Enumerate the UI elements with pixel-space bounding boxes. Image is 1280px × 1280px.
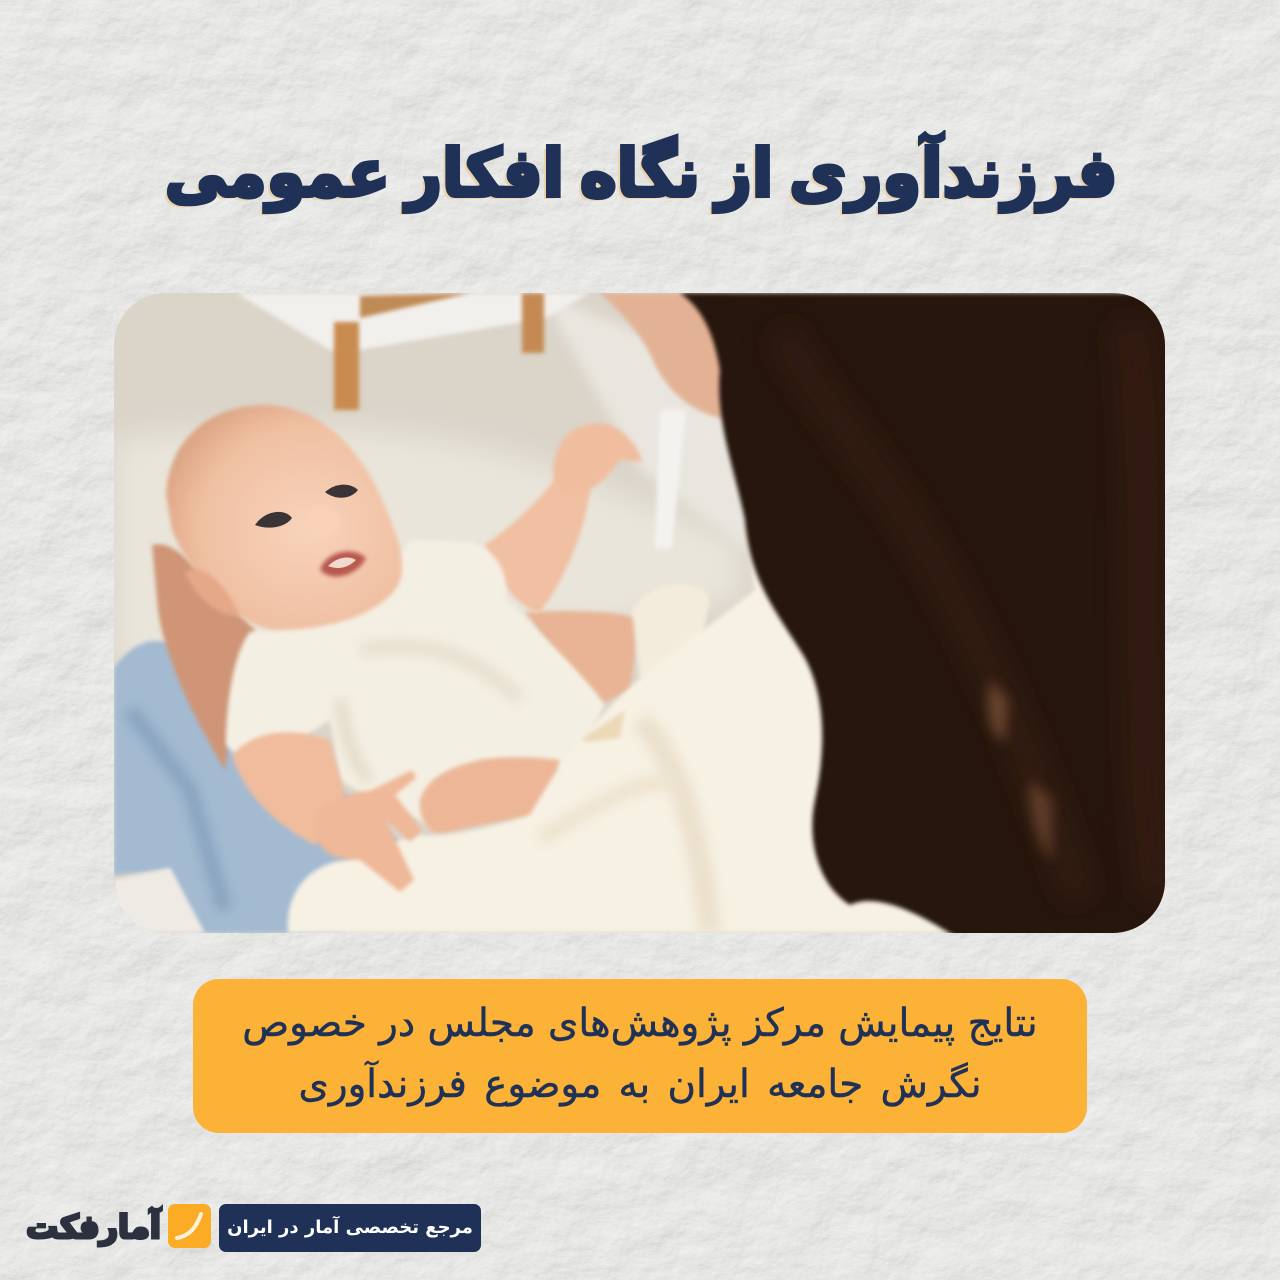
baby legs xyxy=(525,584,710,705)
photo: mother holding baby xyxy=(114,293,1165,933)
mother's cream sweater xyxy=(288,530,1010,933)
title: فرزندآوری از نگاه افکار عمومی xyxy=(165,135,1117,212)
mother's hand and forearm xyxy=(152,544,255,770)
logo wordmark: آمارفکت xyxy=(26,1208,161,1246)
baby nose xyxy=(304,506,340,538)
baby onesie xyxy=(226,540,605,830)
baby mouth xyxy=(320,551,366,577)
tagline badge: مرجع تخصصی آمار در ایران xyxy=(227,1217,473,1238)
icon: logo mark xyxy=(168,1204,211,1248)
callout: survey description: نگرش جامعه ایران به موضوع فرزندآوری xyxy=(298,1062,982,1107)
callout: survey description: نتایج پیمایش مرکز پژوهش‌های مجلس در خصوص xyxy=(242,1001,1038,1046)
mother's long dark hair xyxy=(680,293,1175,943)
room background xyxy=(114,293,1165,933)
baby eyes xyxy=(255,512,292,528)
mother's jeans xyxy=(114,641,420,933)
crib furniture xyxy=(236,293,686,548)
baby ear xyxy=(185,570,240,616)
baby raised arm xyxy=(485,423,642,612)
mother's face xyxy=(600,293,740,420)
baby lower arm and hand xyxy=(232,732,422,892)
callout: survey description xyxy=(193,979,1087,1133)
tagline badge xyxy=(219,1204,481,1252)
baby head xyxy=(166,405,402,630)
baby lower leg xyxy=(420,757,560,835)
